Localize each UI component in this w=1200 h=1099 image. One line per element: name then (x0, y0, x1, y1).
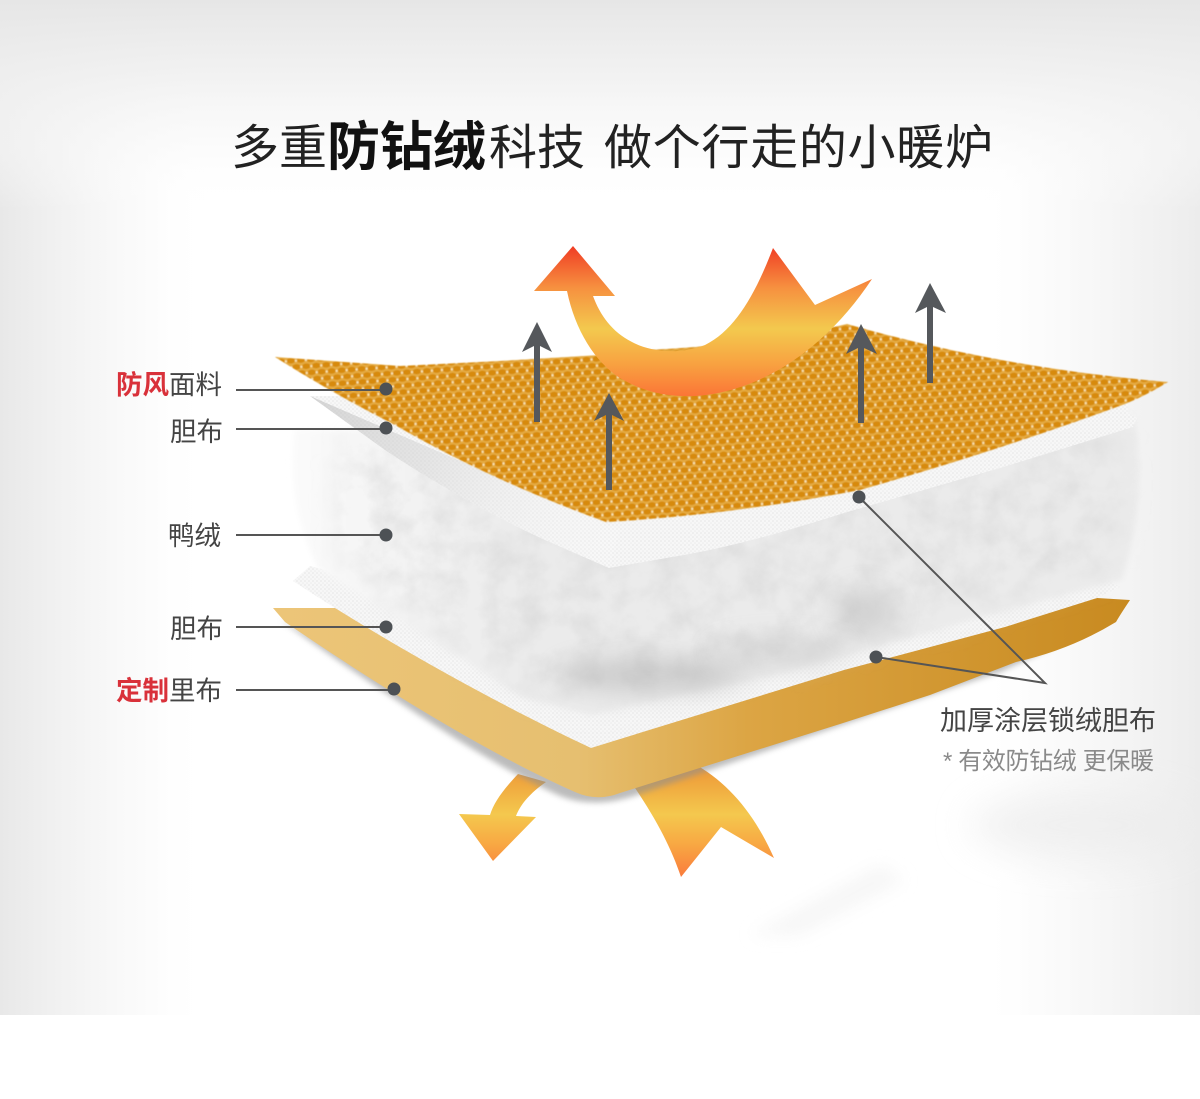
callout: coated down-proof cloth (852, 490, 1156, 775)
lining shadow (280, 620, 1100, 803)
arrow: warmth rising 3 (846, 324, 877, 423)
title: 做个行走的小暖炉 (604, 122, 993, 175)
label: lower inner cloth: 胆布 (170, 614, 223, 644)
layer: lower inner cloth (293, 566, 1120, 748)
callout: coated down-proof cloth: 加厚涂层锁绒胆布 (940, 706, 1156, 736)
title: 防钻绒 (327, 118, 486, 177)
label: windproof shell (116, 370, 392, 400)
arrow: warmth rising 1 (522, 322, 552, 422)
label: lower inner cloth (170, 614, 392, 644)
arrow: large heat reflection (534, 246, 872, 396)
label: upper inner cloth: 胆布 (170, 417, 223, 447)
title (231, 118, 993, 177)
layer: custom lining (273, 598, 1130, 797)
layer: windproof shell (275, 324, 1168, 522)
label: custom lining: 定制里布 (116, 676, 222, 706)
label: upper inner cloth (170, 417, 392, 447)
title: 科技 (489, 122, 585, 175)
title: 多重 (231, 122, 327, 175)
arrow: warmth rising 4 (915, 283, 946, 383)
lower heat arrows (459, 766, 774, 877)
arrow: heat escaping lower left (459, 774, 546, 861)
layer: duck down fill (293, 420, 1139, 715)
label: windproof shell: 防风面料 (116, 370, 222, 400)
label: duck down: 鸭绒 (168, 521, 221, 551)
diagram: insulated layers (273, 324, 1168, 803)
arrow: warmth rising 2 (594, 393, 624, 490)
arrow: heat lower right (635, 766, 774, 877)
label: duck down (168, 521, 392, 551)
layer: upper inner cloth (310, 396, 1137, 568)
callout: coated down-proof cloth: * 有效防钻绒 更保暖 (943, 748, 1154, 775)
label: custom lining (116, 676, 400, 706)
